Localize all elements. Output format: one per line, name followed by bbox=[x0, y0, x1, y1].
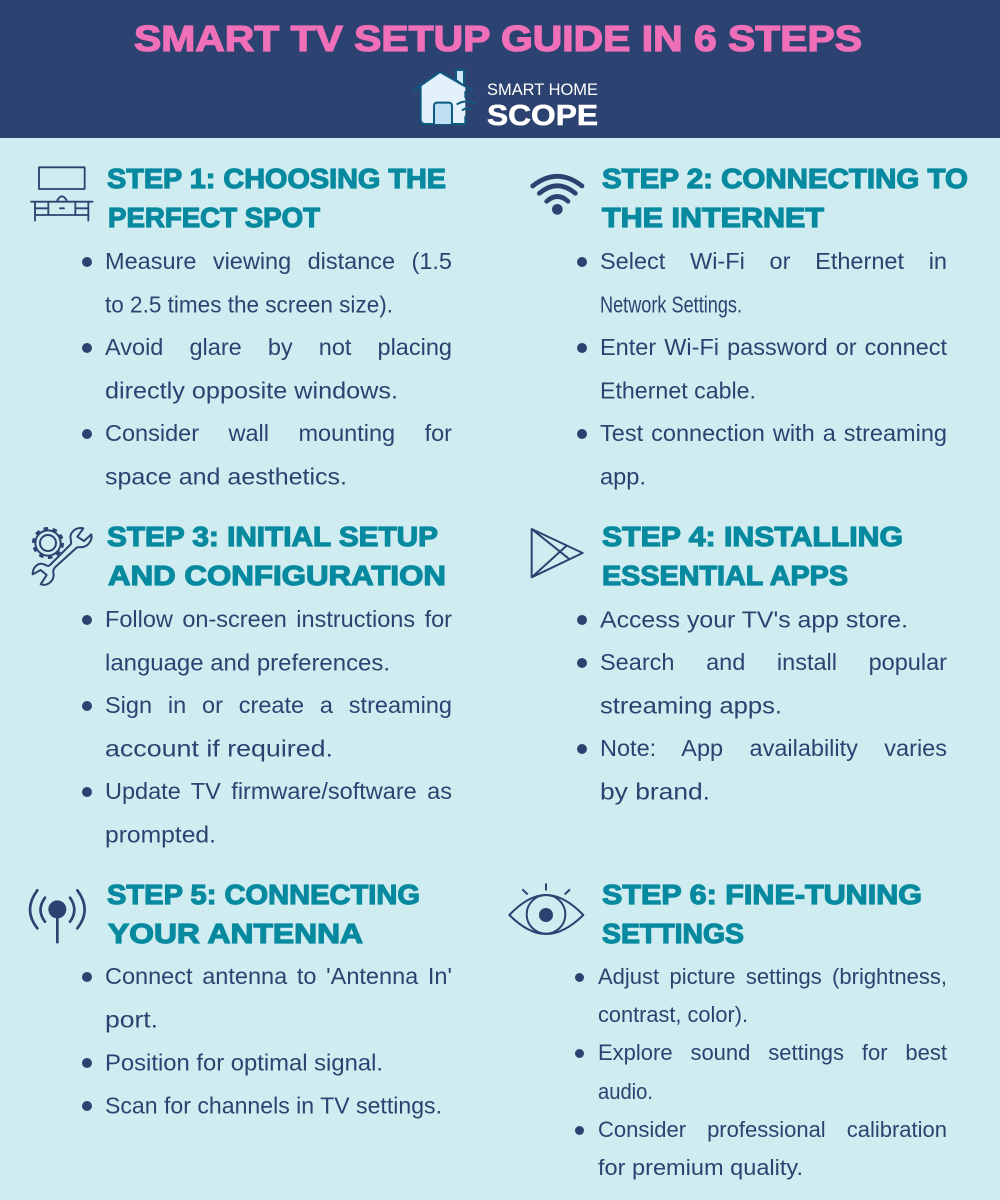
header band bbox=[0, 0, 1000, 138]
text block: step 5 bullets: Scan for channels in TV settings. bbox=[105, 1092, 442, 1118]
heading: step 5: YOUR ANTENNA bbox=[108, 918, 363, 949]
heading: step 3: AND CONFIGURATION bbox=[108, 560, 446, 591]
text block: step 1 bullets: Measure viewing distance (1.5 bbox=[105, 248, 452, 274]
title: SMART TV SETUP GUIDE IN 6 STEPS bbox=[134, 18, 862, 59]
logo: Smart Home Scope bbox=[412, 69, 598, 132]
text block: step 6 bullets: Adjust picture settings (brightness, bbox=[598, 964, 947, 989]
logo: Smart Home Scope: SCOPE bbox=[487, 100, 598, 132]
panel: step 5 bbox=[28, 879, 452, 1118]
text block: step 3 bullets: account if required. bbox=[105, 735, 333, 761]
text block: step 4 bullets: by brand. bbox=[600, 778, 710, 804]
heading: step 1: PERFECT SPOT bbox=[108, 202, 320, 233]
heading: step 3: STEP 3: INITIAL SETUP bbox=[107, 521, 438, 552]
heading: step 4: ESSENTIAL APPS bbox=[602, 560, 848, 591]
icon: antenna bbox=[28, 888, 86, 944]
text block: step 6 bullets: Consider professional calibration bbox=[598, 1117, 947, 1142]
panel: step 6 bbox=[508, 879, 947, 1180]
text block: step 4 bullets: streaming apps. bbox=[600, 692, 782, 718]
heading: step 1: STEP 1: CHOOSING THE bbox=[107, 163, 446, 194]
text block: step 2 bullets: Ethernet cable. bbox=[600, 377, 756, 403]
text block: step 1 bullets bbox=[82, 248, 452, 490]
text block: step 4 bullets: Search and install popular bbox=[600, 649, 947, 675]
text block: step 3 bullets bbox=[82, 606, 452, 848]
text block: step 2 bullets: Test connection with a streaming bbox=[600, 420, 947, 446]
panel: step 2 bbox=[530, 163, 968, 490]
heading: step 6 bbox=[602, 879, 922, 949]
icon: TV on stand bbox=[30, 166, 94, 222]
text block: step 6 bullets: audio. bbox=[598, 1079, 653, 1104]
text block: step 6 bullets: Explore sound settings for best bbox=[598, 1040, 947, 1065]
text block: step 6 bullets: for premium quality. bbox=[598, 1155, 803, 1180]
text block: step 2 bullets: Network Settings. bbox=[600, 291, 742, 317]
icon: wifi bbox=[530, 174, 584, 215]
text block: step 2 bullets: Enter Wi-Fi password or connect bbox=[600, 334, 947, 360]
text block: step 5 bullets: Position for optimal signal. bbox=[105, 1049, 383, 1075]
heading: step 6: SETTINGS bbox=[602, 918, 744, 949]
text block: step 3 bullets: Sign in or create a streaming bbox=[105, 692, 452, 718]
heading: step 5: STEP 5: CONNECTING bbox=[107, 879, 420, 910]
heading: step 4 bbox=[602, 521, 903, 591]
logo: Smart Home Scope: SMART HOME bbox=[487, 81, 598, 99]
text block: step 4 bullets: Access your TV's app store. bbox=[600, 606, 908, 632]
heading: step 6: STEP 6: FINE-TUNING bbox=[602, 879, 922, 910]
text block: step 3 bullets: language and preferences. bbox=[105, 649, 390, 675]
heading: step 2: THE INTERNET bbox=[602, 202, 824, 233]
text block: step 3 bullets: Update TV firmware/software as bbox=[105, 778, 452, 804]
panel: step 4 bbox=[530, 521, 947, 804]
text block: step 1 bullets: to 2.5 times the screen size). bbox=[105, 291, 393, 317]
text block: step 3 bullets: prompted. bbox=[105, 821, 216, 847]
text block: step 2 bullets bbox=[577, 248, 947, 490]
text block: step 3 bullets: Follow on-screen instructions for bbox=[105, 606, 452, 632]
text block: step 6 bullets: contrast, color). bbox=[598, 1002, 748, 1027]
text block: step 2 bullets: Select Wi-Fi or Ethernet in bbox=[600, 248, 947, 274]
text block: step 2 bullets: app. bbox=[600, 463, 646, 489]
panel: step 1 bbox=[30, 163, 452, 490]
icon: play triangle bbox=[530, 528, 584, 578]
text block: step 5 bullets bbox=[82, 963, 452, 1118]
text block: step 1 bullets: Consider wall mounting for bbox=[105, 420, 452, 446]
icon: eye bbox=[508, 883, 584, 935]
heading: step 2: STEP 2: CONNECTING TO bbox=[602, 163, 968, 194]
text block: step 5 bullets: Connect antenna to 'Antenna In' bbox=[105, 963, 452, 989]
text block: step 5 bullets: port. bbox=[105, 1006, 158, 1032]
text block: step 1 bullets: directly opposite windows. bbox=[105, 377, 398, 403]
icon: gear and wrench bbox=[32, 527, 93, 586]
heading: step 2 bbox=[602, 163, 968, 233]
text block: step 4 bullets: Note: App availability varies bbox=[600, 735, 947, 761]
text block: step 4 bullets bbox=[577, 606, 947, 804]
text block: step 6 bullets bbox=[575, 964, 947, 1180]
panel: step 3 bbox=[32, 521, 452, 848]
heading: step 5 bbox=[107, 879, 420, 949]
heading: step 1 bbox=[107, 163, 446, 233]
heading: step 4: STEP 4: INSTALLING bbox=[602, 521, 903, 552]
heading: step 3 bbox=[107, 521, 446, 591]
text block: step 1 bullets: Avoid glare by not placing bbox=[105, 334, 452, 360]
text block: step 1 bullets: space and aesthetics. bbox=[105, 463, 347, 489]
